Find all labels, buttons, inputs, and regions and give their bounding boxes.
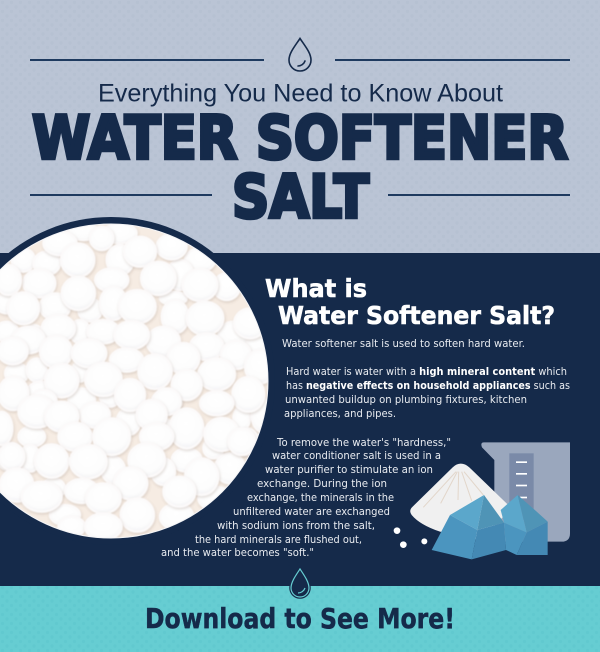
icon: water drop	[289, 38, 311, 71]
text block: ion exchange: the hard minerals are flushed out,	[195, 533, 362, 546]
heading: what is water softener salt: What is	[265, 274, 367, 303]
text block: ion exchange: exchange, the minerals in the	[247, 491, 394, 504]
text block: ion exchange: To remove the water's "hardness,"	[276, 436, 451, 449]
title: SALT	[232, 162, 369, 232]
text block: hard water: unwanted buildup on plumbing fixtures, kitchen	[285, 393, 527, 406]
beaker	[481, 442, 570, 542]
icon: beaker with salt pile and rocks	[394, 442, 570, 559]
call to action: Download to See More!	[145, 602, 455, 635]
text block: ion exchange: and the water becomes "soft."	[161, 546, 314, 559]
salt grains	[394, 527, 427, 548]
salt pile	[410, 464, 512, 540]
text block: hard water: has negative effects on household appliances such as	[286, 379, 570, 392]
lower title rules	[30, 194, 570, 196]
text block: hard water: Hard water is water with a high mineral content which	[286, 365, 567, 378]
text block: hard water: appliances, and pipes.	[284, 407, 396, 420]
text block: hard water	[284, 365, 570, 420]
top rule with water drop	[30, 38, 570, 71]
text block: ion exchange: with sodium ions from the salt,	[217, 519, 375, 532]
heading: what is water softener salt	[265, 274, 555, 330]
heading: what is water softener salt: Water Softener Salt?	[278, 301, 555, 330]
panel: what is water softener salt	[0, 253, 600, 586]
text block: ion exchange: water conditioner salt is used in a	[272, 449, 441, 462]
icon: bottom water drop	[291, 569, 309, 597]
background: header	[0, 0, 600, 260]
subtitle: Everything You Need to Know About	[98, 80, 503, 108]
photo: salt pellets in circle	[0, 217, 275, 545]
text block: ion exchange: exchange. During the ion	[257, 477, 387, 490]
text block: ion exchange: unfiltered water are exchanged	[233, 505, 390, 518]
title	[32, 104, 568, 232]
text block: ion exchange: water purifier to stimulate an ion	[265, 463, 433, 476]
panel: download banner	[0, 586, 600, 652]
rocks	[432, 495, 548, 559]
text block: ion exchange	[161, 436, 451, 559]
text block: intro: Water softener salt is used to soften hard water.	[282, 337, 525, 350]
